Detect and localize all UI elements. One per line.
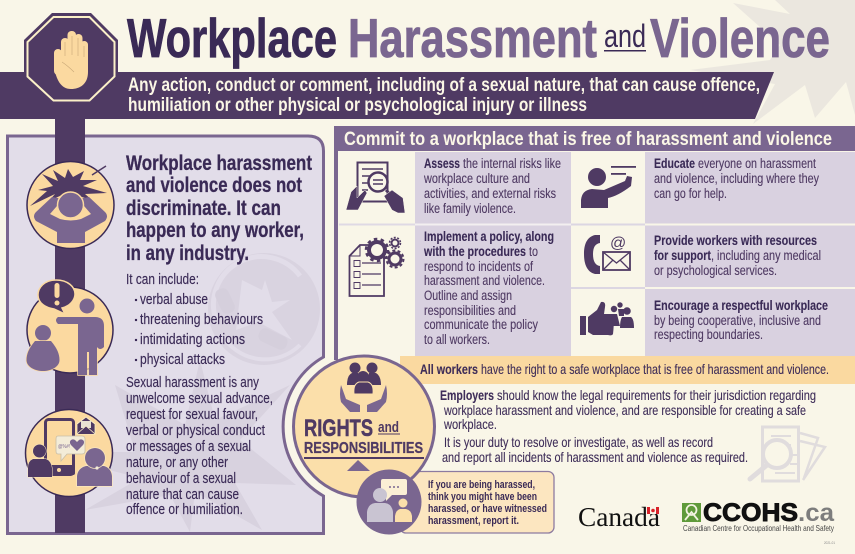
text: provide resources: , including any medical [711, 248, 821, 263]
text: sexual harassment definition: nature, or any other [126, 454, 228, 471]
definition banner [0, 72, 774, 119]
text: employers: It is your duty to resolve or investigate, as well as record [444, 434, 713, 450]
text: assess: activities, and external risks [424, 186, 556, 201]
band: all workers: All workers [420, 361, 478, 377]
print code: 2021-01 [824, 541, 835, 545]
badge title: RIGHTS [304, 415, 373, 442]
logo: CCOHS: CCOHS [703, 499, 798, 527]
text: employers: and report all incidents of harassment and violence as required. [442, 449, 748, 465]
icon: people in hands [340, 362, 387, 412]
text: examples list: threatening behaviours [140, 311, 263, 328]
definition banner: humiliation or other physical or psychological injury or illness [128, 94, 587, 116]
icon: messages: @%#! [58, 444, 70, 450]
text: heading left panel: and violence does not [126, 174, 302, 197]
text: implement a policy: harassment and violence. [424, 273, 545, 288]
logo: CCOHS: .ca [798, 499, 835, 527]
stop sign hand icon [24, 13, 118, 104]
text: sexual harassment definition: nature that can cause [126, 486, 239, 503]
icon: checklist and gears [350, 238, 404, 296]
icon: threatening person [26, 280, 113, 375]
text: provide resources [654, 233, 821, 278]
icon: phone and email: @ [610, 235, 626, 252]
badge: rights and responsibilities [294, 356, 434, 497]
text: provide resources: for support [654, 248, 711, 263]
text: examples list: verbal abuse [140, 291, 208, 308]
text: employers: Employers [440, 387, 494, 403]
text: educate: everyone on harassment [698, 156, 816, 171]
spine bar [55, 119, 85, 533]
logo: Canada wordmark: Canada [578, 502, 660, 532]
text: implement a policy: Outline and assign [424, 288, 512, 303]
text: implement a policy [423, 229, 554, 347]
text: employers [440, 387, 816, 465]
text: educate: Educate [654, 156, 695, 171]
text: sexual harassment definition: request for sexual favour, [126, 406, 258, 423]
icon: report speech circle [356, 470, 422, 534]
text: examples list: intimidating actions [140, 331, 245, 348]
icon: educator [581, 166, 636, 208]
text: implement a policy: to [529, 244, 538, 259]
text: implement a policy: Implement a policy, along [424, 229, 554, 244]
text: educate: and violence, including where they [654, 171, 819, 186]
text: implement a policy: to all workers. [424, 332, 490, 347]
text: sexual harassment definition: verbal or physical conduct [126, 422, 266, 439]
text: sexual harassment definition: offence or humiliation. [126, 501, 243, 518]
watermark: starburst [40, 360, 296, 532]
text: sexual harassment definition: behaviour of a sexual [126, 470, 236, 487]
text: examples list: physical attacks [140, 351, 225, 368]
badge title: and [378, 419, 399, 436]
text: encourage: respecting boundaries. [654, 327, 763, 342]
text: examples list: It can include: [126, 271, 199, 288]
text: assess: workplace culture and [423, 171, 530, 186]
panel: commit to a workplace [334, 126, 855, 360]
text: sexual harassment definition: unwelcome sexual advance, [126, 390, 273, 407]
title [127, 7, 830, 69]
text: provide resources: Provide workers with resources [654, 233, 817, 248]
text: assess: Assess [424, 156, 460, 171]
watermark: fist [208, 253, 320, 365]
text: encourage [654, 298, 828, 342]
icon: faded document and magnifier [750, 427, 825, 481]
text: heading left panel: in any industry. [126, 242, 249, 265]
text: implement a policy: communicate the policy [424, 317, 538, 332]
text: examples list [126, 271, 263, 368]
callout: report it [400, 472, 554, 533]
text: provide resources: or psychological services. [654, 263, 777, 278]
text: sexual harassment definition: Sexual harassment is any [126, 374, 259, 391]
text: heading left panel: discriminate. It can [126, 197, 281, 220]
title: and [604, 18, 646, 54]
logo: CCOHS [682, 499, 835, 533]
text: sexual harassment definition [126, 374, 273, 518]
text: educate [654, 156, 819, 201]
icon: distressed worker [27, 162, 114, 248]
text: employers: workplace. [443, 416, 497, 432]
text: assess [423, 156, 561, 216]
text: heading left panel [126, 152, 312, 265]
text: implement a policy: with the procedures [423, 244, 526, 259]
text: heading left panel: Workplace harassment [126, 152, 312, 175]
badge title: RESPONSIBILITIES [304, 440, 423, 457]
text: assess: the internal risks like [463, 156, 561, 171]
callout: report it: harassment, report it. [428, 515, 519, 527]
badge title [304, 415, 424, 459]
text: heading left panel: happen to any worker, [126, 219, 304, 242]
text: implement a policy: responsibilities and [424, 303, 516, 318]
callout: report it: If you are being harassed, [428, 479, 535, 491]
panel: who is affected [8, 136, 324, 534]
title: Harassment [348, 7, 597, 69]
icon: document and magnifier [346, 162, 405, 213]
text: educate: can go for help. [654, 186, 727, 201]
band: all workers [400, 356, 855, 384]
text: implement a policy: respond to incidents of [424, 259, 533, 274]
icon: phone and email [584, 235, 630, 274]
icon: messages [26, 410, 112, 496]
text: assess: like family violence. [424, 201, 516, 216]
icon: thumbs up and people [580, 302, 634, 335]
callout: report it: think you might have been [428, 491, 537, 503]
title: Workplace [127, 7, 337, 69]
text: sexual harassment definition: or messages of a sexual [126, 438, 251, 455]
callout: report it: harassed, or have witnessed [428, 503, 547, 515]
